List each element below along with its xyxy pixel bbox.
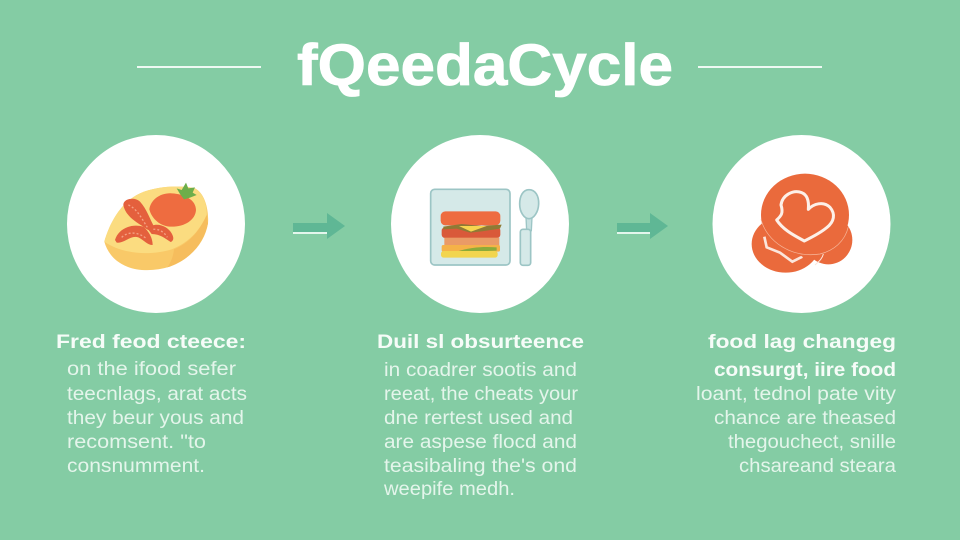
text block: step 2: are aspese flocd and <box>384 432 577 453</box>
text block: step 2: reeat, the cheats your <box>384 384 579 405</box>
text block: step 2 <box>377 332 584 500</box>
text block: step 2: in coadrer sootis and <box>384 360 577 381</box>
panel: step 2 icon, burger tray and spoon <box>391 135 569 313</box>
arrow 1 <box>293 213 345 239</box>
text block: step 3: chsareand steara <box>739 456 896 477</box>
arrow 2 <box>617 213 668 239</box>
text block: step 1: Fred feod cteece: <box>56 332 246 353</box>
text block: step 3: food lag changeg <box>708 332 896 353</box>
text block: step 2: weepife medh. <box>383 479 515 500</box>
text block: step 1: on the ifood sefer <box>67 359 237 380</box>
text block: step 3: loant, tednol pate vity <box>696 384 897 405</box>
text block: step 3: consurgt, iire food <box>714 360 896 381</box>
text block: step 1: teecnlags, arat acts <box>67 384 247 405</box>
title with side rules: fQeedaCycle <box>297 33 673 98</box>
text block: step 3: chance are theased <box>714 408 896 429</box>
text block: step 2: teasibaling the's ond <box>384 456 577 477</box>
panel: step 3 icon, stacked hearts <box>712 135 890 313</box>
text block: step 1: consnumment. <box>67 456 205 477</box>
text block: step 2: Duil sl obsurteence <box>377 332 584 353</box>
text block: step 2: dne rertest used and <box>384 408 573 429</box>
panel: step 1 icon, food bowl <box>67 135 245 313</box>
text block: step 1: recomsent. "to <box>67 432 206 453</box>
text block: step 1 <box>56 332 247 477</box>
text block: step 1: they beur yous and <box>67 408 244 429</box>
text block: step 3 <box>696 332 897 477</box>
text block: step 3: thegouchect, snille <box>728 432 896 453</box>
